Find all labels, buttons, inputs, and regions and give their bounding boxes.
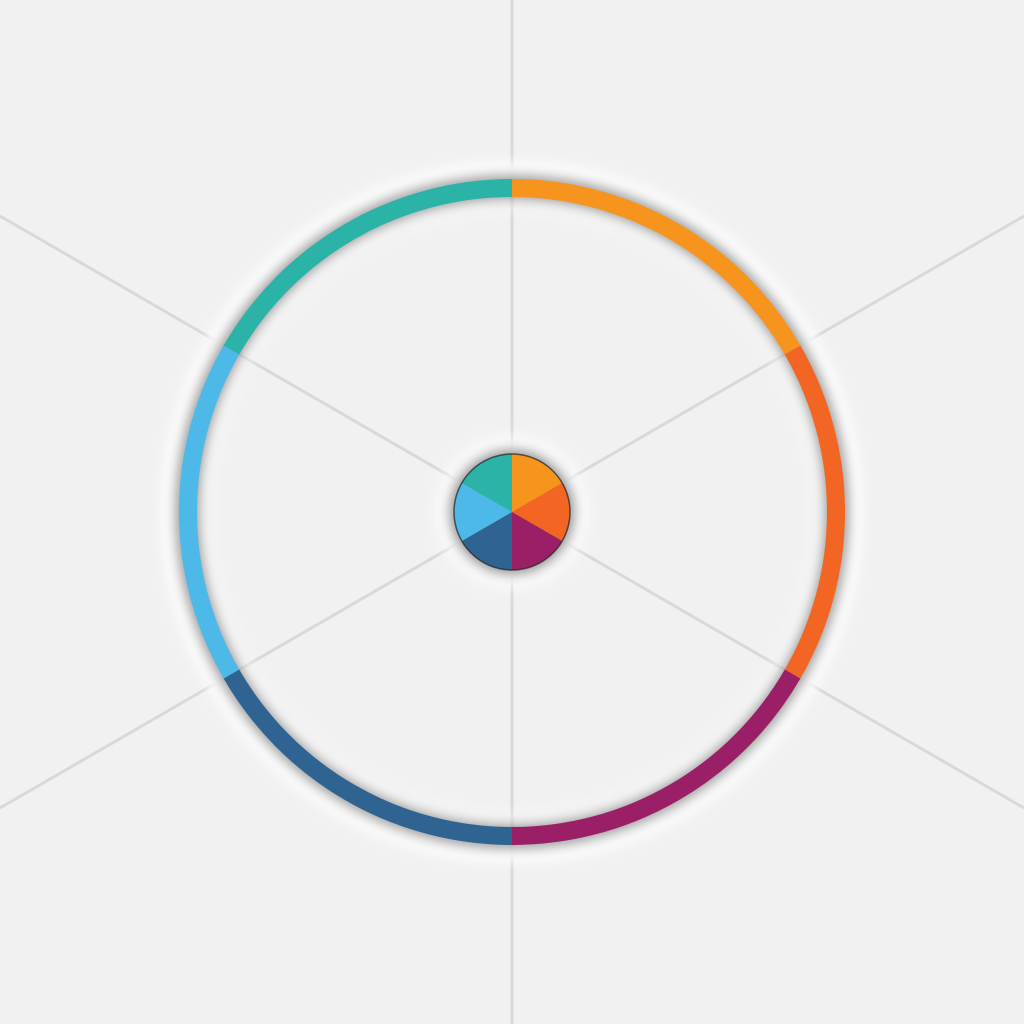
colored ring — [188, 188, 836, 836]
center disc shadow — [438, 438, 586, 586]
ring shadow / glow — [172, 172, 852, 852]
center pie disc — [454, 454, 570, 570]
